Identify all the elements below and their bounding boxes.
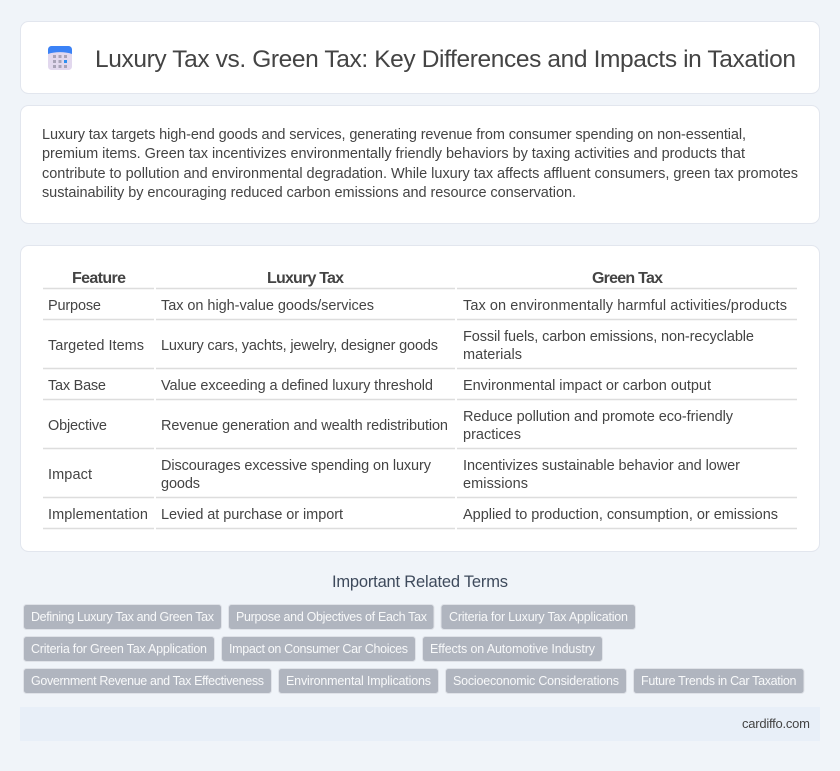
tag: Criteria for Green Tax Application [31,642,207,656]
tag: Future Trends in Car Taxation [641,674,797,688]
row: targeted items: Fossil fuels, carbon emissions, non-recyclable [463,329,754,345]
table header row: Luxury Tax [267,270,344,287]
heading: important related terms: Important Related Terms [332,573,508,591]
tag: Defining Luxury Tax and Green Tax [31,610,215,624]
panel: introduction text: sustainability by encouraging reduced carbon emissions and resource conservation. [42,185,576,201]
related term tags [24,604,804,694]
panel: introduction text: premium items. Green tax incentivizes environmentally friendly behaviors by taxing activities and products that [42,146,745,162]
tag [422,636,602,662]
tag [446,668,626,694]
icon: calendar [48,46,72,70]
table header row: Feature [72,270,126,287]
tag [441,604,636,630]
row: impact: Incentivizes sustainable behavior and lower [463,458,740,474]
row: targeted items: materials [463,347,522,363]
panel: introduction text: Luxury tax targets high-end goods and services, generating revenue from consumer spending on non-essential, [42,127,746,143]
row: impact: goods [161,476,200,492]
table header row: Green Tax [592,270,663,287]
row: purpose: Purpose [48,298,101,314]
row: targeted items [48,329,754,363]
row: objective: Reduce pollution and promote eco-friendly [463,409,734,425]
tag [24,636,214,662]
tag: Effects on Automotive Industry [430,642,596,656]
panel: introduction text: contribute to pollution and environmental degradation. While luxury tax affects affluent consumers, green tax promotes [42,166,798,182]
tag: Purpose and Objectives of Each Tax [236,610,428,624]
row: implementation: Applied to production, consumption, or emissions [463,507,778,523]
title: Luxury Tax vs. Green Tax: Key Differences and Impacts in Taxation [95,46,796,73]
row: targeted items: Luxury cars, yachts, jewelry, designer goods [161,338,438,354]
footer bar [20,707,820,741]
tag [228,604,434,630]
row: implementation: Levied at purchase or import [161,507,343,523]
row: targeted items: Targeted Items [48,338,144,354]
tag [222,636,416,662]
tag: Criteria for Luxury Tax Application [449,610,628,624]
tag [24,668,272,694]
row: purpose: Tax on environmentally harmful activities/products [463,298,787,314]
tag [634,668,804,694]
row: objective: Objective [48,418,107,434]
row: impact: emissions [463,476,528,492]
row: objective [48,409,734,443]
row: implementation [48,507,778,523]
row: impact: Discourages excessive spending on luxury [161,458,432,474]
row: tax base: Environmental impact or carbon output [463,378,711,394]
table header row [72,270,663,287]
row: purpose [48,298,787,314]
tag: Government Revenue and Tax Effectiveness [31,674,264,688]
row: impact [48,458,740,492]
row: tax base: Value exceeding a defined luxury threshold [161,378,433,394]
tag [278,668,438,694]
tag: Impact on Consumer Car Choices [229,642,408,656]
footer bar: cardiffo.com [742,716,810,731]
row: purpose: Tax on high-value goods/services [161,298,374,314]
row: tax base [48,378,711,394]
row: impact: Impact [48,467,92,483]
row: objective: practices [463,427,521,443]
row: implementation: Implementation [48,507,148,523]
panel: comparison table [20,246,820,552]
tag: Environmental Implications [286,674,431,688]
panel: introduction text [20,106,820,224]
header panel [20,22,820,94]
tag: Socioeconomic Considerations [453,674,619,688]
tag [24,604,222,630]
row: objective: Revenue generation and wealth redistribution [161,418,448,434]
row: tax base: Tax Base [48,378,106,394]
